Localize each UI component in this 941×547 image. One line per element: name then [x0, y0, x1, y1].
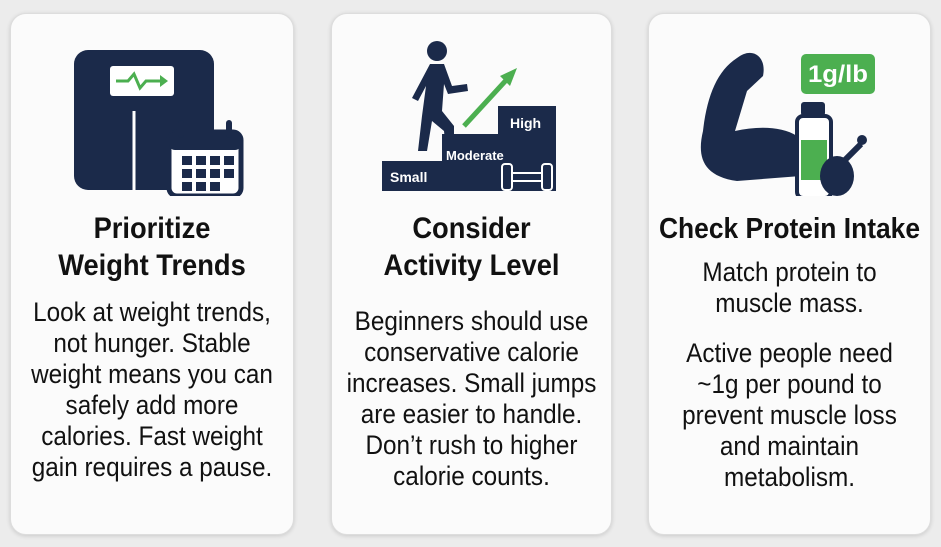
text block: calorie counts. [393, 461, 550, 491]
text block: Look at weight trends, [33, 297, 271, 327]
icon: stairs with runner: Small [390, 169, 427, 185]
text block: safely add more [66, 390, 238, 420]
icon: stairs with runner: Moderate [446, 148, 504, 163]
text block: Beginners should use [355, 306, 588, 336]
text block [347, 306, 596, 491]
panel: protein [648, 13, 931, 535]
text block: Active people need [686, 338, 893, 368]
heading: Consider [412, 212, 531, 245]
text block: weight means you can [31, 359, 273, 389]
heading: Weight Trends [58, 249, 246, 282]
text block: conservative calorie [364, 337, 579, 367]
icon: arm with protein bottle [700, 52, 875, 196]
text block: calories. Fast weight [41, 421, 263, 451]
panel: activity level [331, 13, 612, 535]
text block: ~1g per pound to [697, 369, 882, 399]
text block: metabolism. [724, 462, 855, 492]
text block [682, 338, 897, 492]
text block: Don’t rush to higher [365, 430, 578, 460]
text block: muscle mass. [715, 288, 864, 318]
heading: Activity Level [383, 249, 559, 282]
text block: prevent muscle loss [682, 400, 897, 430]
icon: arm with protein bottle: 1g/lb [808, 61, 868, 88]
text block: not hunger. Stable [53, 328, 251, 358]
icon: stairs with runner: High [510, 115, 541, 131]
text block: and maintain [720, 431, 859, 461]
text block: increases. Small jumps [347, 368, 596, 398]
text block: Match protein to [702, 257, 877, 287]
icon: scale with calendar [74, 50, 244, 196]
text block: gain requires a pause. [32, 452, 272, 482]
heading: Prioritize [94, 212, 210, 245]
icon: stairs with runner [382, 41, 556, 191]
text block: are easier to handle. [361, 399, 582, 429]
heading [58, 212, 246, 282]
text block [31, 297, 273, 482]
panel: weight trends [10, 13, 294, 535]
heading: Check Protein Intake [659, 213, 920, 245]
text block [702, 257, 877, 318]
heading [383, 212, 559, 282]
